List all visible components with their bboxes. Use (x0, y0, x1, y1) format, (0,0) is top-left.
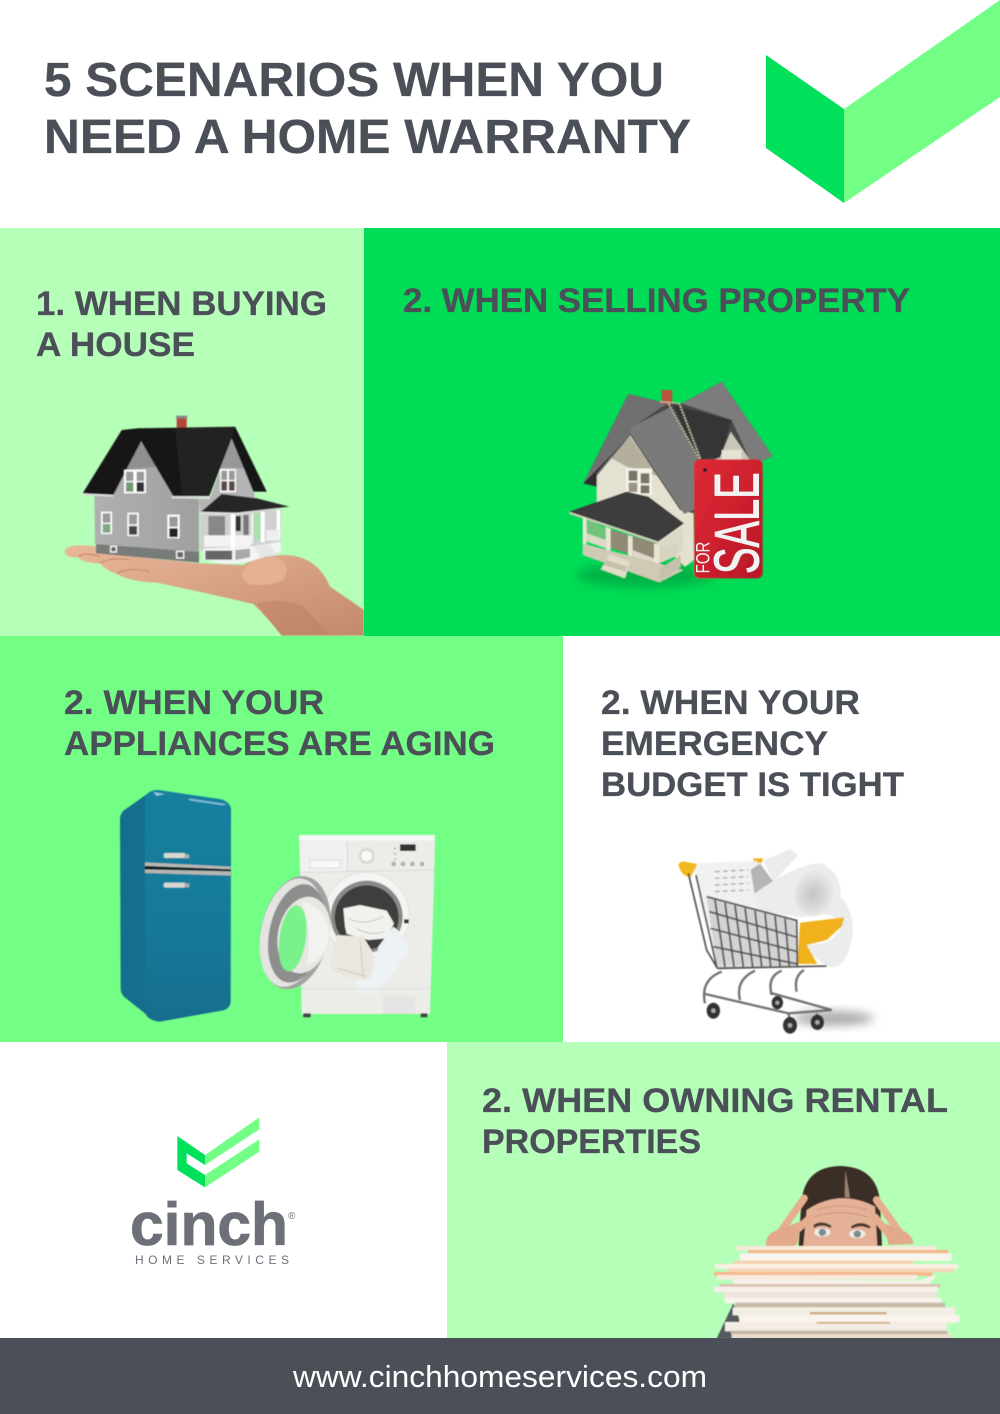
panel: 1. when buying a house (0, 228, 364, 636)
title: 5 SCENARIOS WHEN YOU (44, 54, 664, 107)
tag text: FOR (693, 542, 714, 573)
logo wordmark: cinch (130, 1191, 288, 1258)
logo wordmark: ® (288, 1211, 296, 1222)
heading: when owning rental properties: PROPERTIES (482, 1123, 701, 1161)
heading: when owning rental properties: 2. WHEN OWNING RENTAL (482, 1082, 948, 1120)
windows (101, 469, 236, 559)
panel: 5. when owning rental properties (447, 1042, 1000, 1338)
illustration: washing machine with open door (249, 835, 435, 1017)
icon: large green checkmark (766, 0, 1000, 203)
website url: www.cinchhomeservices.com (292, 1359, 707, 1394)
heading: when your emergency budget is tight: BUDGET IS TIGHT (601, 766, 904, 804)
heading: when buying a house: 1. WHEN BUYING (36, 285, 327, 323)
heading: when selling property: 2. WHEN SELLING PROPERTY (403, 282, 910, 320)
heading: when owning rental properties (482, 1082, 948, 1161)
icon: cinch check mark (177, 1117, 259, 1187)
header (44, 0, 1000, 203)
illustration: blue refrigerator (120, 790, 231, 1022)
logo wordmark: HOME SERVICES (135, 1253, 289, 1267)
heading: when your appliances are aging (64, 684, 495, 763)
panel: cinch logo (0, 1042, 447, 1338)
heading: when your emergency budget is tight: 2. WHEN YOUR (601, 684, 860, 722)
panel: 4. when your emergency budget is tight (563, 636, 1000, 1042)
tag text (693, 472, 772, 574)
heading: when your emergency budget is tight: EMERGENCY (601, 725, 828, 763)
title: NEED A HOME WARRANTY (44, 111, 691, 164)
panel: 3. when your appliances are aging (0, 636, 563, 1042)
illustration: house on open hand (65, 416, 364, 636)
heading: when buying a house: A HOUSE (36, 326, 195, 364)
illustration: shopping cart full of receipts (678, 849, 873, 1034)
heading: when your appliances are aging: APPLIANCES ARE AGING (64, 725, 495, 763)
footer bar (0, 1338, 1000, 1414)
panel: 2. when selling property (364, 228, 1000, 636)
illustration: stressed person behind stack of papers (714, 1166, 959, 1338)
tag text: SALE (702, 472, 772, 574)
heading: when your emergency budget is tight (601, 684, 904, 804)
title (44, 54, 691, 164)
heading: when your appliances are aging: 2. WHEN YOUR (64, 684, 324, 722)
illustration: model house with for sale tag (569, 382, 773, 588)
heading: when buying a house (36, 285, 327, 364)
